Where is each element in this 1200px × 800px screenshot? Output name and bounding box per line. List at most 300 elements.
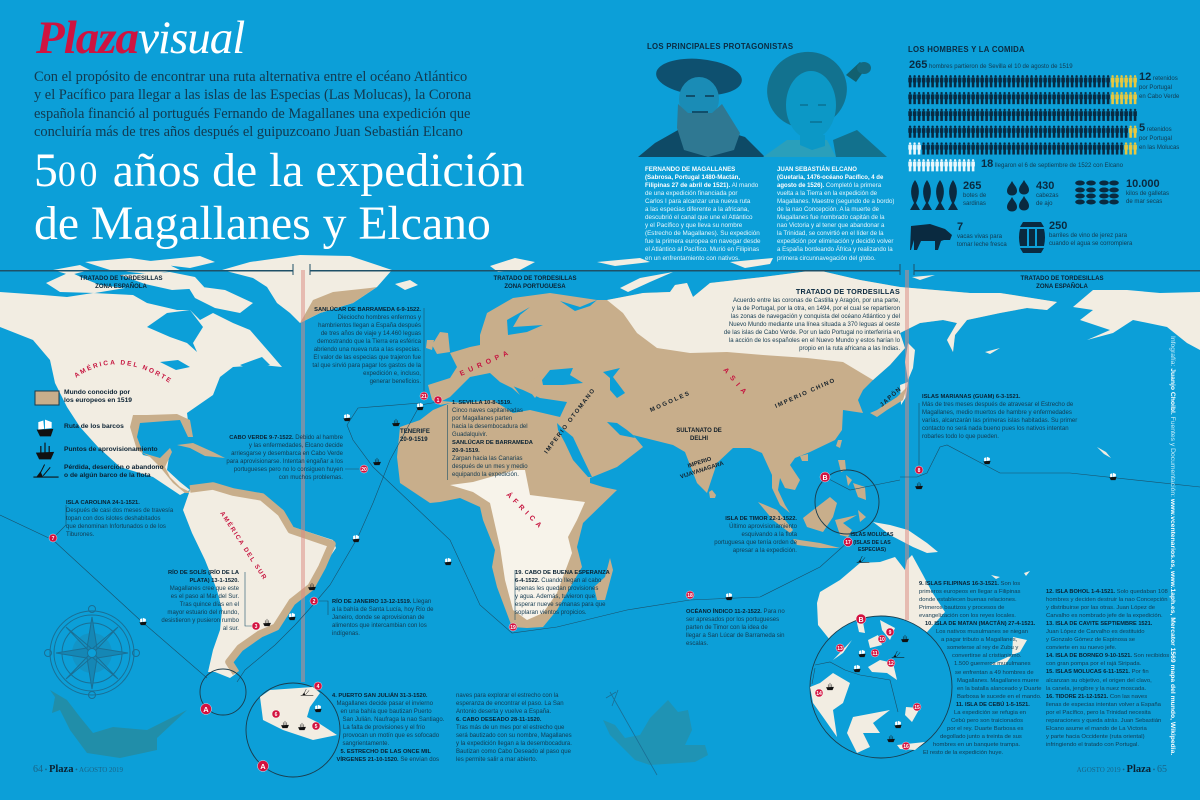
land: Canadian Arctic islands [46,256,253,313]
text: Sanlúcar return: demostrando que la Tierra era esférica [317,339,421,345]
text: Sevilla: hacia la desembocadura del [452,424,528,430]
legend ship route [37,420,53,436]
text: Cabo Verde: portugueses pero no lo consiguen huyen [234,467,343,473]
text: Filipinas, Matan and Cebú: La expedición se refugia en [954,710,1026,716]
text: Cabo Deseado: 6. CABO DESEADO 28-11-1520. [456,717,541,723]
text: Isla de Timor: apresar a la expedición. [733,548,797,554]
text: Elcano: a España bordeando África y realizando la [777,246,893,253]
text: Cabo Deseado: Antonio deserta y vuelve a España. [456,709,551,715]
label: Europa: EUROPA [459,348,513,378]
text: Cabo Deseado [456,692,572,763]
label: Spanish zone right: ZONA ESPAÑOLA [1036,284,1088,290]
land: Japan Taiwan Hainan Sri Lanka Madagascar [594,387,907,600]
legend text: loss: o de algún barco de la flota [64,472,151,479]
text: Elcano: expedición por eliminación y decidió volver [777,238,893,245]
text: Río de Solís: al sur. [223,626,239,632]
text: Filipinas, Matan and Cebú: se enfrentan a 49 hombres de [955,670,1034,676]
heading: men and food: LOS HOMBRES Y LA COMIDA [908,45,1025,54]
text: Bohol to Tidore: convierte en su nuevo jefe. [1046,645,1116,651]
text: Océano Índico: ser apresados por los portugueses [686,617,779,623]
text: Filipinas, Matan and Cebú: donde establecen buenas relaciones. [919,597,1017,603]
text: Treaty of Tordesillas: Nuevo Mundo mediante una línea situada a 370 leguas al oeste [729,322,900,328]
text: Sevilla [452,400,533,478]
heading: protagonists: LOS PRINCIPALES PROTAGONISTAS [647,42,793,51]
stat: 5 retained: 5 retenidos [1139,122,1172,134]
text: Cabo de Buena Esperanza: apenas les quedan provisiones [515,586,598,592]
pictogram: 265 men [908,75,1138,172]
label: Spanish zone right: TRATADO DE TORDESILLAS [1020,276,1103,282]
text: Cabo Deseado: Tras más de un mes por el estrecho que [456,725,564,731]
land: South America [183,483,336,678]
legend ship supply [36,443,54,459]
stat: 5 retained: en las Molucas [1139,145,1179,151]
numbered markers: 9 [889,630,892,636]
stat: wine: cuando el agua se corrompiera [1049,241,1132,247]
text: Treaty of Tordesillas: TRATADO DE TORDESILLAS [796,287,900,296]
numbered markers: 5 [315,724,318,730]
text: Cabo Verde: para aprovisionarse. Intentan engañar a los [226,459,343,465]
text: Isla de Timor: Último aprovisionamiento [729,524,797,530]
text: Filipinas, Matan and Cebú: Cebú pero son traicionados [951,718,1023,724]
text: Río de Janeiro: a la bahía de Santa Lucía, hoy Río de [332,607,434,613]
text: Cabo de Buena Esperanza: soplaran vientos propicios. [515,610,587,616]
land: New Guinea [873,522,938,553]
text: Elcano: la Trinidad, se convirtió en el líder de la [777,230,884,237]
text: Isla de Timor: ISLA DE TIMOR 22-1-1522. [725,516,797,522]
text: Isla Carolina: topan con dos islotes deshabitados [66,516,160,522]
text: Río de Solís [161,569,239,632]
numbered markers [49,392,923,772]
text: Río de Solís: es el paso al Mar del Sur. [171,594,239,600]
text: Magallanes [645,166,761,262]
stat: wine: barriles de vino de jerez para [1049,233,1127,239]
text: Treaty of Tordesillas: la acción de los españoles en el Nuevo Mundo y estos harían lo [729,338,900,344]
numbered markers: B [858,617,864,624]
text: Elcano: Magallanes. Maestre (segundo de a bordo) [777,198,894,205]
text: Bohol to Tidore: 12. ISLA BOHOL 1-4-1521. Solo quedaban 108 [1046,589,1168,595]
text: Filipinas, Matan and Cebú: convertirse al cristianismo. [952,653,1021,659]
text: Sevilla: 20-9-1519. [452,448,480,454]
text: Filipinas, Matan and Cebú: por el rey. Duarte Barbosa es [947,726,1024,732]
intro paragraph: y el Pacífico para llegar a las islas de las Especias (Las Molucas), la Corona [34,87,471,103]
text: Sevilla: Cinco naves capitaneadas [452,408,523,414]
land: South America known coast [190,486,332,673]
legend text: loss [64,464,164,479]
stat: wine: 250 [1049,220,1067,232]
map region labels [75,348,903,582]
text: Río de Solís: mayor estuario del mundo, [167,610,239,616]
label: Imperio Vijayanagara: IMPERIO [687,456,713,470]
text: Magallanes: (Sabrosa, Portugal 1480-Mactán, [645,174,740,181]
text: Islas Molucas label: ESPECIAS) [858,547,886,553]
numbered markers: 18 [687,593,693,599]
land: Southeast Asia islands [758,460,866,548]
label: Sultanato de Delhi: SULTANATO DE [676,428,722,434]
text: Río de Janeiro: alimentos que intercambian con los [332,623,427,629]
text: Bohol to Tidore: reparaciones y queda atrás. Juan Sebastián [1046,718,1161,724]
text: Elcano: nao Victoria y al tener que abandonar a [777,222,884,229]
intro paragraph: Con el propósito de encontrar una ruta alternativa entre el océano Atlántico [34,69,467,85]
icons: biscuits [1075,180,1119,204]
label: América del Sur: AMÉRICA DEL SUR [218,509,270,582]
text: Magallanes: Filipinas 27 de abril de 1521). Al mando [645,182,758,189]
text: Bohol to Tidore: alcanzan su objetivo, el origen del clavo, [1046,678,1152,684]
label: Portuguese zone [494,276,576,290]
text: Cabo Deseado: será bautizado con su nombre, Magallanes [456,733,572,739]
text: Cabo Verde: y las enfermedades, Elcano decide [249,443,343,449]
label: Portuguese zone: TRATADO DE TORDESILLAS [494,276,576,282]
ships [139,403,1117,742]
text: Bohol to Tidore: llenas de especias intentan volver a España [1046,702,1161,708]
icons: garlic [1007,180,1029,212]
text: Isla de Timor: portuguesa que tenía orden de [714,540,797,546]
title: 500 años de la expedición [34,144,525,197]
text: Islas Marianas: Magallanes, medio muertos de hambre y enfermedades [922,410,1072,416]
legend text: loss: Pérdida, deserción o abandono [64,464,164,471]
stat: sardines: sardinas [963,201,986,207]
text: Filipinas, Matan and Cebú: 10. ISLA DE MATAN (MACTÁN) 27-4-1521. [925,621,1035,627]
text: Filipinas, Matan and Cebú: Los nativos musulmanes se niegan [936,629,1028,635]
stat: 12 retained: 12 retenidos [1139,71,1178,83]
text: Océano Índico [686,608,785,647]
text: Sanlúcar return: expedición e, incluso, [363,371,421,377]
numbered markers: 4 [317,684,320,690]
text: Filipinas, Matan and Cebú: 1.500 guerreros musulmanes [954,661,1031,667]
label: África: ÁFRICA [505,490,547,532]
text: Puerto San Julián [332,692,444,763]
numbered markers: 2 [313,599,316,605]
text: Cabo de Buena Esperanza: y agua. Además, tuvieron que [515,594,595,600]
text: Islas Marianas: robarles todo lo que pueden. [922,434,999,440]
numbered markers: A [260,762,266,771]
numbered markers: 14 [816,691,822,697]
text: Cabo de Buena Esperanza: 6-4-1522. Cuando llegan al cabo [515,578,601,584]
legend text: known world [64,389,132,404]
stat: garlic: de ajo [1036,201,1052,207]
stat: 12 retained: por Portugal [1139,85,1172,91]
text: Cabo Verde: con muchos problemas. [279,475,343,481]
route [0,308,1200,682]
land: Atlantic and northern islands [395,258,935,292]
text: Puerto San Julián: en una bahía que bautizan Puerto [340,709,432,715]
text: Sanlúcar return: hambrientos llegan a España después [318,323,421,329]
text: Puerto San Julián: sangrientamente. [342,741,389,747]
icon: barrel [1019,222,1045,253]
text: Bohol to Tidore [1046,589,1169,748]
numbered markers: 11 [872,651,878,657]
stat: wine [1049,220,1132,247]
text: Islas Marianas: varías, alcanzarán las primeras islas habitadas. Su primer [922,418,1077,424]
text: Bohol to Tidore: y parte hacia Occidente (ruta oriental) [1046,734,1145,740]
text: Filipinas, Matan and Cebú: 11. ISLA DE CEBÚ 1-5-1521. [956,702,1030,708]
land: North America [0,292,282,495]
legend text: supply: Puntos de aprovisionamiento [64,446,158,453]
numbered markers: 20 [361,467,367,473]
text: Elcano: Magallanes fue nombrado capitán de la [777,214,885,221]
text: Filipinas, Matan and Cebú [919,581,1042,756]
text: Isla Carolina: que denominan Infortunados o de los [66,524,166,530]
text: Sevilla: después de un mes y medio [452,464,528,470]
label: Mogoles: MOGOLES [649,390,692,414]
text: Bohol to Tidore: 16. TIDORE 21-12-1521. Con las naves [1046,694,1147,700]
text: Filipinas, Matan and Cebú: El resto de la expedición huye. [923,750,1003,756]
stat: sardines [963,180,986,207]
text: Filipinas, Matan and Cebú: Barbosa le sucede en el mando. [957,694,1042,700]
text: Río de Janeiro: indígenas. [332,631,360,637]
label: Portuguese zone: ZONA PORTUGUESA [504,284,566,290]
stat: 12 retained [1139,71,1180,100]
stat: 5 retained [1139,122,1179,151]
text: Elcano: vuelta a la Tierra en la expedición de [777,190,877,197]
numbered markers: 19 [510,625,516,631]
text: Filipinas, Matan and Cebú: Magallanes. Magallanes muere [957,678,1039,684]
text: Océano Índico: escalas. [686,641,708,647]
intro paragraph: española financió al portugués Fernando de Magallanes una expedición que [34,106,470,122]
text: Magallanes: en un enfrentamiento con nativos. [645,255,740,262]
text: Cabo Deseado: les permite salir a mar abierto. [456,757,537,763]
portrait: Juan Sebastián Elcano [759,43,887,157]
text: Puerto San Julián: provocan un motín que es sofocado [343,733,439,739]
text: Sanlúcar return: abriendo una nueva ruta a las especias. [314,347,421,353]
text: Filipinas, Matan and Cebú: degollado junto a treinta de sus [940,734,1022,740]
text: Isla de Timor [714,516,797,554]
text: Tenerife [400,428,430,443]
text: Treaty of Tordesillas: las zonas de navegación y conquista del océano Atlántico y del [731,314,900,320]
stat: 265 men: 265 hombres partieron de Sevilla el 10 de agosto de 1519 [909,59,1073,71]
text: Filipinas, Matan and Cebú: someterse al rey de Zubu y [947,645,1018,651]
title: de Magallanes y Elcano [34,197,491,250]
stat: cows [957,221,1007,248]
text: Magallanes: fue la primera europea en navegar desde [645,238,761,245]
text: Magallanes: el Atlántico al Pacífico. Murió en Filipinas [645,246,759,253]
label: Imperio Otomano: IMPERIO OTOMANO [544,387,597,455]
land: New Zealand and Pacific islands [985,348,1111,665]
stat: cows: vacas vivas para [957,234,1002,240]
text: Bohol to Tidore: la canela, jengibre y la nuez moscada. [1046,686,1146,692]
text: Sanlúcar return: Dieciocho hombres enfermos y [338,315,421,321]
text: Bohol to Tidore: con gran pompa por el rajá Siripada. [1046,661,1141,667]
text: Océano Índico: parten de Timor con la idea de [686,625,768,631]
land: Gulf of Mexico known coast [130,414,193,493]
text: Bohol to Tidore: 15. ISLAS MOLUCAS 6-11-1521. Por fin [1046,669,1149,675]
numbered markers: 16 [903,744,909,750]
numbered markers: 8 [918,468,921,474]
stat: garlic: 430 [1036,180,1054,192]
intro paragraph: concluiría más de tres años después el guipuzcoano Juan Sebastián Elcano [34,124,463,140]
sea: Hudson Bay and Great Lakes [147,310,270,370]
stat: sardines: botes de [963,193,986,199]
text: Sanlúcar return: El valor de las especias que trajeron fue [313,355,421,361]
legend text: route: Ruta de los barcos [64,423,124,430]
text: Río de Solís: Magallanes cree que este [170,586,239,592]
stat: 18 returned: 18 llegaron el 6 de septiembre de 1522 con Elcano [981,158,1123,170]
text: Islas Molucas label: (ISLAS DE LAS [853,540,891,546]
legend swatch [35,391,59,405]
text: Isla Carolina [66,500,174,538]
stat: 12 retained: en Cabo Verde [1139,94,1179,100]
text: Bohol to Tidore: Juan López de Carvalho es destituido [1046,629,1145,635]
stat: biscuits: de mar secas [1126,199,1162,205]
stat: cows: tomar leche fresca [957,242,1007,248]
text: Islas Marianas: contacto no será nada bueno pues los nativos intentan [922,426,1069,432]
stat: biscuits [1126,178,1169,205]
text: Cabo de Buena Esperanza: 19. CABO DE BUENA ESPERANZA [515,570,610,576]
numbered markers: 10 [879,637,885,643]
land: Africa and Eurasia [397,270,1057,628]
numbered markers: 6 [275,712,278,718]
text: Treaty of Tordesillas: y la de Portugal, por la otra, en 1494, por el cual se repartieron [732,306,900,312]
numbered markers: 17 [845,540,851,546]
text: Bohol to Tidore: por el Pacífico, pero la Trinidad necesita [1046,710,1151,716]
label: Asia: ASIA [721,367,750,399]
text: Bohol to Tidore: hombres y deciden destruir la nao Concepción [1046,597,1167,603]
text: Sanlúcar return: generar beneficios. [370,379,421,385]
text: Tenerife: 20-9-1519 [400,437,428,443]
text: Río de Solís: desistieron y pusieron rumbo [161,618,239,624]
legend text: known world: Mundo conocido por [64,389,130,396]
text: Puerto San Julián: 5. ESTRECHO DE LAS ONCE MIL [340,749,431,755]
numbered markers: 3 [255,624,258,630]
text: Cabo de Buena Esperanza: esperar nueve semanas para que [515,602,605,608]
text: Magallanes: a las especias diferente a la africana, [645,206,749,213]
legend icons [33,391,59,477]
numbered markers: 1 [437,398,440,404]
text: Cabo Verde: CABO VERDE 9-7-1522. Debido al hambre [229,435,343,441]
text: Isla Carolina: ISLA CAROLINA 24-1-1521. [66,500,140,506]
intro paragraph [34,69,472,140]
text: Elcano: primera circunnavegación del globo. [777,255,876,262]
text: Sevilla: Guadalquivir. [452,432,487,438]
label: Japón: JAPÓN [878,385,903,408]
text: Sevilla: 1. SEVILLA 10-8-1519. [452,400,512,406]
text: Puerto San Julián: Magallanes decide pasar el invierno [336,701,433,707]
stat: garlic: cabezas [1036,193,1059,199]
text: Tenerife: TENERIFE [400,429,430,435]
text: Cabo Deseado: esperanza de encontrar el paso. La San [456,701,564,707]
text: Océano Índico: llegar a San Lúcar de Barrameda sin [686,633,784,639]
text: Filipinas, Matan and Cebú: a pagar tributo a Magallanes, [941,637,1017,643]
text: Río de Solís: Tras quince días en el [180,602,239,608]
text: Magallanes: descubrió el canal que une el Atlántico [645,214,752,221]
text: Bohol to Tidore: y distribuirse por las otras. Juan López de [1046,605,1155,611]
text: Cabo Verde: arriesgarse y desembarca en Cabo Verde [231,451,343,457]
land: Greenland known coast [300,287,377,323]
credits: vertical: Infografía: Juanjo Choibl. Fuentes y Documentación: www.vcentenarios.es, www.1aph.es, Mercator 1569 mapa del mundo, Wikipedia. [1169,336,1176,755]
text: Puerto San Julián: San Julián. Naufraga la nao Santiago. [342,717,444,723]
icon: cow [910,224,952,250]
text: Islas Marianas: ISLAS MARIANAS (GUAM) 6-3-1521. [922,394,1020,400]
text: Filipinas, Matan and Cebú: primeros europeos en llegar a Filipinas [919,589,1021,595]
text: Sevilla: por Magallanes parten [452,416,512,422]
label: Spanish zone left: TRATADO DE TORDESILLAS [80,276,162,282]
stat: cows: 7 [957,221,963,233]
numbered markers: B [822,475,828,482]
land: British Isles [426,332,450,354]
text: Magallanes: Carlos I para alcanzar una nueva ruta [645,198,750,205]
text: Bohol to Tidore: Carvalho es nombrado jefe de la expedición. [1046,613,1163,619]
text: Filipinas, Matan and Cebú: en la batalla alanceado y Duarte [957,686,1042,692]
text: Treaty of Tordesillas: de las islas de Cabo Verde. Por un lado Portugal no interferiría en [724,330,900,336]
text: Puerto San Julián: 4. PUERTO SAN JULIÁN 31-3-1520. [332,693,428,699]
text: Sanlúcar return [312,306,421,385]
text: Río de Solís: PLATA) 13-1-1520. [189,578,239,584]
text: Elcano: agosto de 1526). Completó la primera [777,182,881,189]
legend text: known world: los europeos en 1519 [64,397,132,404]
text: Sevilla: Zarpan hacia las Canarias [452,456,523,462]
portrait: Fernando de Magallanes [638,55,765,157]
inset A: Patagonia [246,683,340,777]
text: Magallanes: y el Pacífico y que lleva su nombre [645,222,742,229]
text: Magallanes: FERNANDO DE MAGALLANES [645,166,735,173]
legend ship loss [33,464,59,477]
compass rose [44,606,140,698]
Tordesillas lines [0,264,1200,682]
text: Océano Índico: OCÉANO ÍNDICO 11-2-1522. Para no [686,609,785,615]
numbered markers: 7 [52,536,55,542]
label: Imperio Chino: IMPERIO CHINO [774,378,837,410]
text: Elcano [777,165,894,262]
text: Cabo Deseado: Bautizan como Cabo Deseado al paso que [456,749,571,755]
text: Elcano: JUAN SEBASTIÁN ELCANO [777,167,857,173]
label: Sultanato de Delhi: DELHI [690,436,708,442]
numbered markers: 13 [837,646,843,652]
text: Cabo de Buena Esperanza [515,570,610,616]
text: Filipinas, Matan and Cebú: Primeros bautizos y procesos de [919,605,1004,611]
text: Bohol to Tidore: Elcano asume el mando de La Victoria [1046,726,1147,732]
numbered markers: A [203,705,209,714]
land: Siberia unknown [607,270,1057,380]
label: Spanish zone right [1020,276,1104,290]
numbered markers: 15 [914,705,920,711]
text: Puerto San Julián: La falta de provisiones y el frío [343,725,425,731]
text: Isla Carolina: Tiburones. [66,532,94,538]
text: Treaty of Tordesillas: propio en la ruta africana a las Indias. [799,346,900,352]
text: Magallanes: de una expedición financiada por [645,190,737,197]
stat: biscuits: 10.000 [1126,178,1160,190]
inset B: Philippines and Moluccas [810,616,952,758]
text: Islas Molucas label [850,532,894,553]
text: Treaty of Tordesillas [724,287,900,352]
text: Cabo Deseado: naves para explorar el estrecho con la [456,693,559,699]
inset circle B small [815,470,879,534]
text: Río de Janeiro: Janeiro, donde se aprovisionan de [332,615,424,621]
text: Islas Molucas label: ISLAS MOLUCAS [851,532,893,538]
land: Australia [817,555,945,640]
text: Sanlúcar return: SANLÚCAR DE BARRAMEDA 6-9-1522. [314,307,421,313]
land: Greenland [222,255,392,323]
land: Cuba and Hispaniola [177,443,225,458]
text: Bohol to Tidore: infringiendo el tratado con Portugal. [1046,742,1139,748]
text: Sanlúcar return: de tres años de viaje y 14.460 leguas [321,331,421,337]
world map [0,255,1200,678]
icons: sardines [910,180,958,210]
text: Sanlúcar return: tal que sirvió para pagar los gastos de la [312,363,421,369]
text: Magallanes: (Estrecho de Magallanes). Su expedición [645,230,760,237]
text: Puerto San Julián: VÍRGENES 21-10-1520. Se envían dos [336,757,439,763]
brand heading: Plazavisual [36,12,244,64]
inset circle A small [200,669,246,715]
text: Bohol to Tidore: y Gonzalo Gómez de Espinosa se [1046,637,1135,643]
label: Spanish zone left: ZONA ESPAÑOLA [95,284,147,290]
numbered markers: 21 [421,394,427,400]
text: Isla Carolina: Después de casi dos meses de travesía [66,508,173,514]
land: Sakhalin and Japan north [900,343,915,405]
footer left: 64 • Plaza • AGOSTO 2019 [33,764,123,775]
text: Islas Marianas: Más de tres meses después de atravesar el Estrecho de [922,402,1073,408]
text: Sevilla: SANLÚCAR DE BARRAMEDA [452,440,533,446]
text: Bohol to Tidore: 14. ISLA DE BORNEO 9-10-1521. Son recibidos [1046,653,1169,659]
seas: Mediterranean Baltic Black Caspian Red Persian [442,300,635,477]
